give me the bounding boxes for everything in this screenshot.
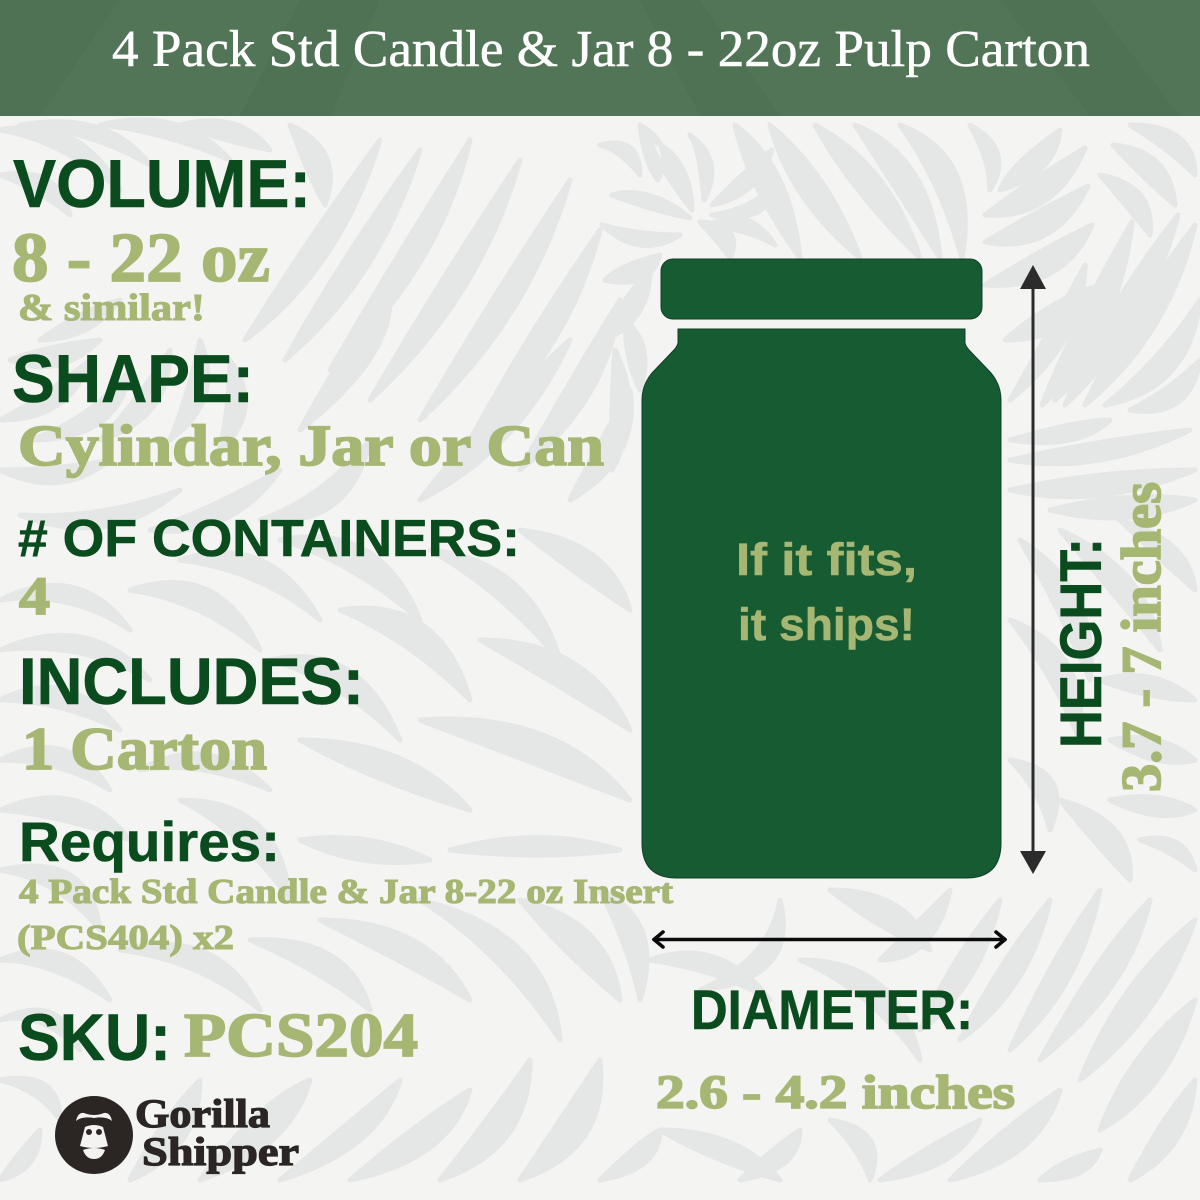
height label	[1049, 482, 1173, 792]
wordmark	[135, 1091, 299, 1174]
sku	[18, 1000, 418, 1074]
arrow: diameter	[654, 932, 1005, 947]
requires spec: Requires:	[19, 810, 280, 873]
number of containers spec: 4	[19, 566, 50, 626]
number of containers spec	[18, 510, 520, 626]
sku: SKU:	[18, 1000, 171, 1074]
jar slogan: If it fits,	[736, 534, 917, 585]
jar body	[642, 329, 1001, 878]
includes spec: INCLUDES:	[19, 644, 364, 718]
volume spec: & similar!	[18, 287, 205, 329]
header band	[0, 0, 1200, 116]
jar slogan: it ships!	[738, 599, 915, 650]
sku: PCS204	[184, 1002, 418, 1070]
shape spec	[12, 341, 604, 478]
wordmark: Shipper	[142, 1129, 299, 1174]
requires spec: (PCS404) x2	[17, 918, 234, 957]
icon: gorilla face	[55, 1096, 133, 1174]
title: 4 Pack Std Candle & Jar 8 - 22oz Pulp Carton	[112, 21, 1090, 78]
number of containers spec: # OF CONTAINERS:	[18, 510, 520, 568]
jar lid	[661, 259, 982, 319]
includes spec	[19, 644, 364, 782]
requires spec	[17, 810, 673, 957]
jar illustration	[642, 259, 1001, 878]
shape spec: Cylindar, Jar or Can	[18, 413, 604, 478]
jar slogan	[736, 534, 917, 650]
volume spec	[12, 146, 311, 329]
height label: 3.7 - 7 inches	[1111, 482, 1173, 792]
height label: HEIGHT:	[1049, 538, 1114, 748]
diameter label	[656, 978, 1015, 1119]
requires spec: 4 Pack Std Candle & Jar 8-22 oz Insert	[19, 872, 673, 911]
volume spec: 8 - 22 oz	[12, 220, 270, 297]
diameter label: 2.6 - 4.2 inches	[656, 1066, 1015, 1119]
arrow: height	[1020, 265, 1046, 874]
wordmark: Gorilla	[135, 1091, 270, 1136]
volume spec: VOLUME:	[13, 146, 311, 222]
logo: Gorilla Shipper	[55, 1091, 299, 1174]
diameter label: DIAMETER:	[691, 978, 973, 1041]
includes spec: 1 Carton	[22, 716, 267, 782]
shape spec: SHAPE:	[12, 341, 254, 417]
